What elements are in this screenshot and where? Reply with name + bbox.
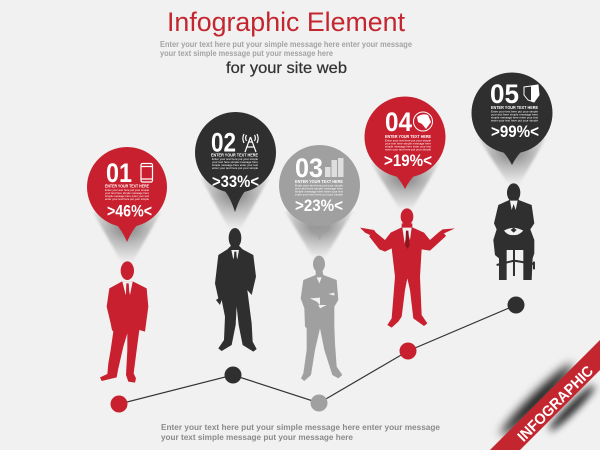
icon: phone [141, 164, 152, 182]
pin 03: simple message here enter your text [295, 190, 343, 194]
pin 05: ENTER YOUR TEXT HERE [491, 105, 538, 110]
pin 04: simple message here enter your text [385, 144, 431, 148]
pin 05: simple message here enter your text [491, 116, 538, 120]
pin 04: 04 [385, 107, 412, 137]
pin 02 [195, 112, 276, 212]
subtitle: for your site web [226, 60, 347, 77]
pin 03: >23%< [295, 196, 343, 215]
pin 01 [87, 147, 167, 242]
pin 03 [279, 145, 360, 240]
pin 05: enter your text here put your simple [491, 118, 538, 122]
figure 5: dark man, seated on chair [493, 183, 534, 280]
icon: globe [414, 112, 432, 131]
pin 01: >46%< [107, 202, 152, 220]
pin 02: ENTER YOUR TEXT HERE [211, 152, 258, 158]
icon: buildings [325, 158, 344, 177]
footer text [161, 423, 441, 442]
connecting line chart [110, 296, 524, 412]
pin 01: simple message here enter your text [105, 194, 149, 198]
chair [497, 250, 534, 276]
pin 03: ENTER YOUR TEXT HERE [295, 179, 343, 184]
pin 03: Enter your text here put your simple [295, 184, 343, 188]
intro text: Enter your text here put your simple message here enter your message [160, 40, 413, 49]
pin 02: >33%< [212, 172, 259, 191]
pin 03: your text here simple message here [295, 186, 343, 190]
pin 02: your text here simple message here [212, 160, 258, 164]
pin 01: ENTER YOUR TEXT HERE [105, 184, 149, 188]
pin 01: 01 [106, 158, 132, 188]
pin 04: Enter your text here put your simple [385, 138, 431, 142]
pin 04 [364, 96, 446, 189]
pin 04: >19%< [384, 151, 432, 170]
pin 02: enter your text here put your simple [212, 166, 258, 170]
icon: antenna tower [243, 134, 258, 152]
shadow beams [93, 138, 546, 263]
figure 1: red man, hands in pockets [100, 261, 148, 383]
pin 01: enter your text here put your simple [105, 197, 149, 201]
pin 02: Enter your text here put your simple [212, 157, 258, 161]
pin 03: 03 [295, 153, 323, 183]
pin 05 [472, 72, 552, 165]
figure 2: dark man, arms down [215, 228, 257, 352]
footer text: your text simple message put your message here [161, 433, 354, 442]
pin 05: Enter your text here put your simple [491, 110, 538, 114]
intro text: your text simple message put your message here [160, 49, 333, 58]
figure 3: grey man, arms crossed [301, 256, 342, 381]
pin 01: your text here simple message here [105, 191, 149, 195]
pin 04: enter your text here put your simple [385, 148, 431, 152]
pin 03: enter your text here put your simple [295, 192, 343, 196]
intro text [160, 40, 413, 58]
corner ribbon: INFOGRAPHIC [514, 362, 597, 445]
pin 05: 05 [490, 79, 519, 109]
icon: shield [524, 85, 539, 102]
pin 04: ENTER YOUR TEXT HERE [385, 134, 431, 139]
pin 05: your text here simple message here [491, 112, 538, 116]
pin 02: 02 [211, 128, 236, 158]
pin 01: Enter your text here put your simple [105, 188, 149, 192]
pin 05: >99%< [491, 122, 539, 141]
pin 02: simple message here enter your text [212, 163, 258, 167]
figure 4: red man, hands raised [360, 208, 455, 328]
footer text: Enter your text here put your simple message here enter your message [161, 423, 441, 432]
pin 04: your text here simple message here [385, 142, 431, 146]
corner ribbon [490, 340, 600, 450]
title: Infographic Element [167, 7, 405, 37]
